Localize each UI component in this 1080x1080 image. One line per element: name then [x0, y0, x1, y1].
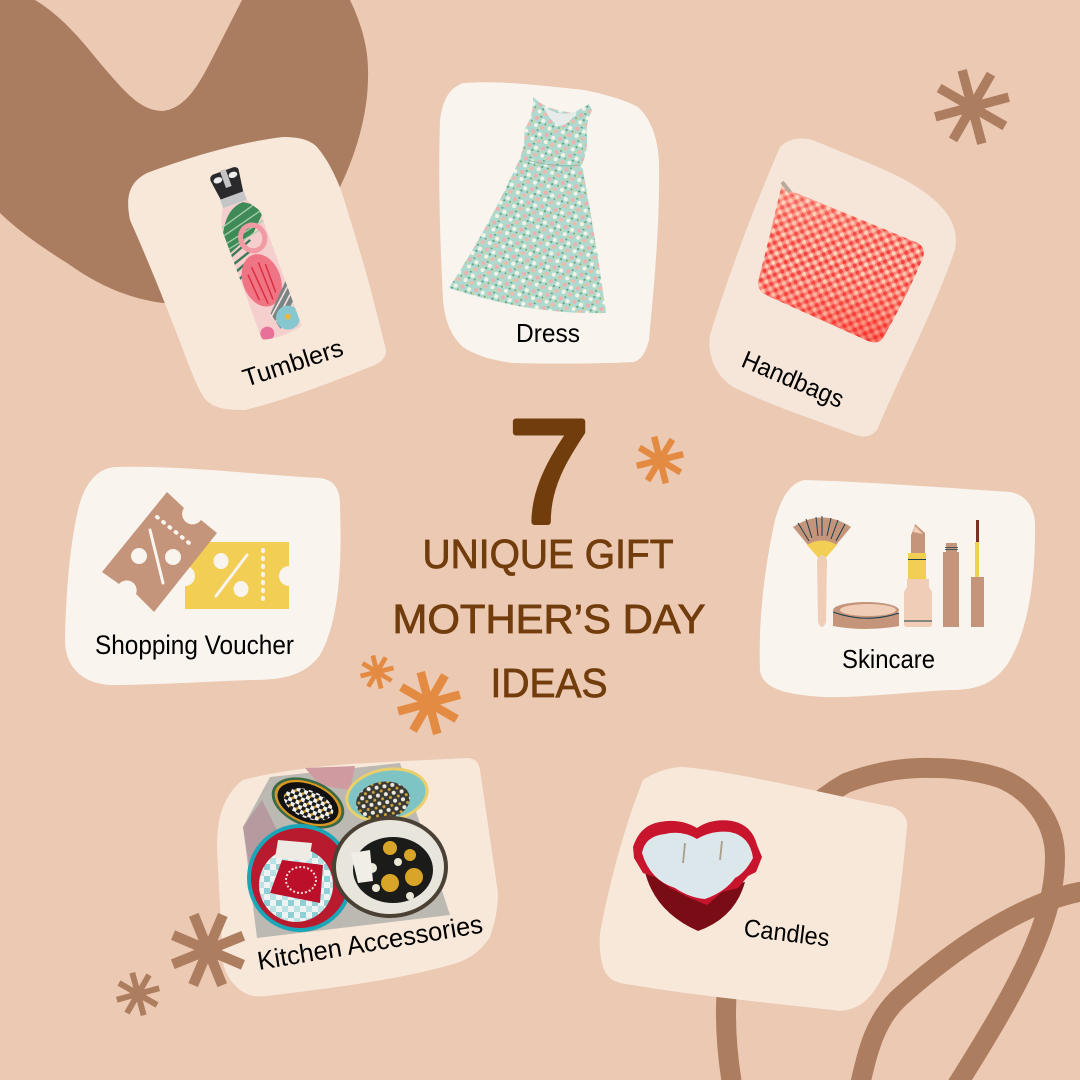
- card: Dress: [439, 82, 659, 364]
- star: large orange: [390, 664, 468, 742]
- candle illustration: [633, 820, 762, 931]
- card: Candles: [600, 767, 907, 1011]
- card shape: [217, 758, 498, 996]
- card shape: [709, 138, 956, 436]
- title: [392, 390, 706, 706]
- decorative loop lines: bottom right: [726, 768, 1080, 1080]
- star: small orange: [356, 651, 398, 693]
- star: large brown: [159, 901, 257, 999]
- heading line 3: IDEAS: [490, 660, 608, 706]
- dress illustration: [449, 97, 606, 313]
- star: small brown: [111, 967, 165, 1021]
- label: Skincare: Skincare: [842, 644, 935, 674]
- star: orange by title: [631, 431, 689, 489]
- card: Handbags: [709, 138, 956, 436]
- card: Kitchen Accessories: [217, 758, 498, 996]
- card shape: [760, 480, 1035, 697]
- makeup illustration: [793, 516, 984, 629]
- label: Shopping Voucher: Shopping Voucher: [95, 630, 294, 660]
- heading line 1: UNIQUE GIFT: [422, 531, 674, 577]
- label: Candles: Candles: [742, 914, 831, 952]
- label: Tumblers: Tumblers: [239, 334, 347, 393]
- numeral 7: 7: [508, 390, 590, 553]
- brown ticket: [102, 492, 217, 612]
- card shape: [128, 137, 386, 410]
- card: Tumblers: [128, 137, 386, 410]
- star: top right: [925, 60, 1019, 154]
- card shape: [600, 767, 907, 1011]
- yellow ticket: [185, 542, 289, 609]
- label: Kitchen Accessories: Kitchen Accessories: [255, 909, 485, 976]
- voucher icons: [102, 492, 289, 612]
- label: Dress: Dress: [516, 318, 580, 348]
- card: Shopping Voucher: [65, 467, 341, 685]
- label: Handbags: Handbags: [738, 346, 848, 414]
- heading line 2: MOTHER’S DAY: [392, 596, 706, 642]
- card shape: [65, 467, 341, 685]
- bag illustration: [758, 182, 924, 342]
- decorative blob: top left: [0, 0, 368, 303]
- card: Skincare: [760, 480, 1035, 697]
- kitchen accessories photo: [243, 761, 450, 938]
- card shape: [439, 82, 659, 364]
- bottle illustration: [209, 165, 305, 344]
